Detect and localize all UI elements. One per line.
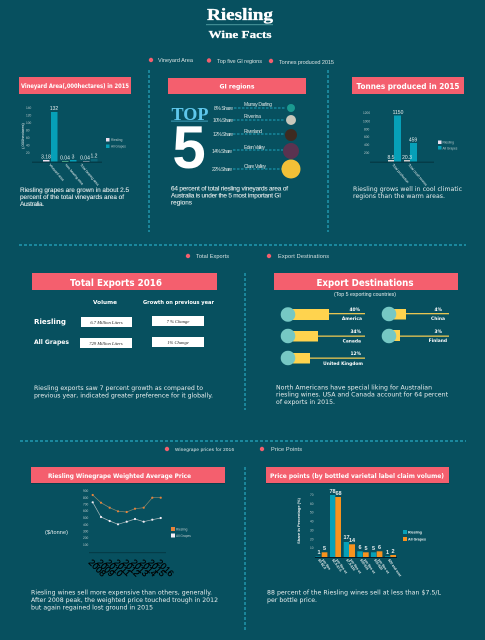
bar chart: vineyard area: 3.18 [41, 154, 51, 160]
bar chart: vineyard area: 140 [26, 106, 32, 110]
chart: destinations: 3% [435, 329, 443, 335]
chart: region shares: Riverina [244, 114, 261, 120]
line chart: prices: 300 [83, 530, 89, 534]
heading: tonnes produced: Tonnes produced in 2015 [356, 82, 460, 91]
table: exports: 1% Change [167, 340, 189, 345]
text: tonnes note: Riesling grows well in cool climatic [353, 186, 463, 193]
bar chart: price points: per litre ex [363, 558, 376, 575]
bar chart: price points: All Grapes [408, 538, 426, 542]
text: vineyard note: percent of the total vineyards area of [20, 194, 124, 201]
chart: destinations [281, 307, 449, 367]
bar chart: vineyard area: All Grapes [111, 144, 126, 148]
table: exports: 7 % Change [167, 319, 189, 324]
chart: region shares: 22% Share [212, 167, 232, 173]
bar chart: price points: 1 [386, 550, 389, 556]
bar chart: price points: 5 [323, 546, 326, 552]
bar chart: tonnes [363, 110, 458, 187]
line chart: prices: 2013 [129, 557, 150, 579]
bar chart: tonnes: All Grapes [442, 146, 458, 150]
bar chart: price points: 2 [391, 549, 395, 555]
bar chart: price points: $2.5-$7.5 [331, 558, 343, 572]
panel: price points [266, 467, 449, 604]
bar chart: tonnes: Total production [391, 163, 410, 184]
heading: price points: Price points (by bottled varietal label claim volume) [270, 472, 444, 480]
line chart: prices: 2009 [95, 557, 116, 579]
line chart: prices [45, 489, 191, 579]
chart: destinations: United Kingdom [323, 361, 363, 367]
bar chart: vineyard area: Non bearing area [64, 163, 84, 186]
panel: total exports [32, 273, 217, 400]
bar chart: price points: per litre ex [335, 558, 348, 575]
bar chart: vineyard area: 132 [50, 106, 58, 112]
line chart: prices: 700 [83, 502, 89, 506]
title: Wine Facts [208, 29, 272, 41]
text: GI note: 64 percent of total riesling vineyards area of [171, 186, 288, 192]
chart: region shares: Riverland [244, 129, 262, 135]
legend: section three: Winegrape prices for 2016 [175, 447, 234, 452]
bar chart: price points: 5 [364, 546, 368, 552]
text: GI note: Australia is under the 5 most important GI [171, 192, 281, 200]
bar chart: vineyard area: 0.04 [80, 156, 90, 162]
bar chart: tonnes: Riesling [442, 140, 454, 144]
table: exports: 6.7 Million Liters [90, 320, 123, 325]
bar chart: tonnes: Total crush tonnes [407, 163, 428, 187]
text: destinations note: riesling wines. USA and Canada account for 64 percent [276, 392, 449, 398]
bar chart: price points: per litre ex [349, 558, 362, 575]
bar chart: vineyard area: Vineyard area [48, 163, 65, 182]
bar chart: tonnes: 8.5 [388, 155, 395, 161]
chart: destinations: 12% [350, 351, 362, 357]
text: price points note: per bottle price. [267, 597, 317, 604]
bar chart: price points: 60 [310, 502, 314, 506]
text: winegrape note: After 2008 peak, the weighted price touched trough in 2012 [31, 597, 218, 604]
chart: destinations: 4% [435, 307, 443, 313]
bar chart: vineyard area: 0.04 [60, 156, 70, 162]
bar chart: tonnes: 800 [364, 128, 370, 132]
text: price points note: 88 percent of the Riesling wines sell at less than $7.5/L [267, 590, 442, 596]
chart: region shares [212, 102, 300, 178]
text: tonnes note: regions than the warm areas. [353, 193, 445, 200]
line chart: prices: 2012 [121, 557, 142, 579]
bar chart: vineyard area: 40 [26, 144, 30, 148]
chart: destinations: America [342, 316, 362, 322]
text: winegrape note: Riesling wines sell more expensive than others, generally. [31, 590, 212, 596]
bar chart: price points: 14 [349, 538, 356, 544]
bar chart: price points: 6 [378, 545, 381, 551]
bar chart: tonnes: 400 [364, 143, 370, 147]
bar chart: price points: 40 [310, 520, 314, 524]
bar chart: tonnes: 1150 [393, 110, 404, 116]
text: GI note: regions [171, 200, 192, 206]
text: vineyard note: Riesling grapes are grown in about 2.5 [20, 187, 129, 194]
line chart: prices: 2014 [138, 557, 159, 579]
title: Riesling [207, 5, 274, 24]
heading: price points [266, 467, 449, 484]
line chart: prices: 2016 [155, 557, 176, 579]
heading: export destinations: Export Destinations [316, 278, 414, 289]
panel: GI regions [168, 78, 306, 206]
bar chart: price points: 10 [310, 546, 314, 550]
line chart: prices: 800 [83, 496, 89, 500]
chart: region shares: Eden Valley [244, 145, 266, 151]
bar chart: price points: 30 [310, 529, 314, 533]
legend: section one: Tonnes produced 2015 [279, 60, 334, 66]
text: exports note: previous year, indicated greater preference for it globally. [34, 392, 213, 400]
heading: winegrape price: Riesling Winegrape Weighted Average Price [48, 472, 192, 480]
chart: destinations: Finland [429, 338, 447, 344]
text: winegrape note: but again regained lost ground in 2015 [31, 604, 153, 612]
chart: destinations: 40% [349, 307, 361, 313]
bar chart: price points: 17 [343, 535, 350, 541]
bar chart: vineyard area: 60 [26, 136, 30, 140]
panel: vineyard area [19, 77, 131, 208]
bar chart: vineyard area: Total bearing area [79, 163, 100, 187]
panel: winegrape price [31, 467, 225, 612]
bar chart: price points: per litre ex [377, 558, 390, 575]
line chart: prices: 600 [83, 509, 89, 513]
legend: section two [186, 254, 329, 260]
bar chart: price points [296, 489, 426, 578]
bar chart: vineyard area: 20 [26, 151, 30, 155]
panel: tonnes produced [352, 77, 464, 200]
legend: section one: Vineyard Area [158, 58, 194, 64]
line chart: prices: 2015 [146, 557, 167, 579]
table: exports: Volume [93, 300, 117, 306]
graphic: top 5: TOP [172, 104, 208, 124]
table: exports: All Grapes [34, 339, 69, 346]
legend: section three: Price Points [271, 447, 302, 453]
table: exports: Riesling [34, 318, 66, 326]
bar chart: price points: 6 [358, 545, 362, 551]
line chart: prices: 900 [83, 489, 89, 493]
bar chart: price points: 70 [310, 493, 314, 497]
bar chart: tonnes: 200 [364, 151, 370, 155]
bar chart: tonnes: 1000 [363, 120, 370, 124]
bar chart: vineyard area: 1.2 [91, 154, 98, 160]
bar chart: tonnes: 600 [364, 135, 370, 139]
bar chart: vineyard area: 100 [26, 121, 32, 125]
graphic: top 5: 5 [172, 114, 206, 181]
text: exports note: Riesling exports saw 7 percent growth as compared to [34, 385, 203, 392]
heading: total exports: Total Exports 2016 [70, 278, 162, 289]
bar chart: price points: $0-$2.5 [317, 558, 327, 570]
heading: export destinations [274, 273, 458, 290]
subtitle: (Top 5 exporting countries) [334, 292, 396, 298]
title [206, 5, 274, 41]
legend: section one [149, 58, 334, 66]
bar chart: tonnes: 20.3 [402, 155, 412, 161]
chart: region shares: 12% Share [213, 132, 233, 138]
chart: region shares: 10% Share [213, 118, 233, 124]
table: exports [34, 300, 214, 348]
bar chart: price points: 1 [317, 550, 321, 556]
bar chart: vineyard area: 80 [26, 128, 30, 132]
chart: destinations: Canada [343, 338, 361, 344]
legend: section two: Total Exports [196, 254, 229, 260]
bar chart: price points: 68 [335, 491, 342, 497]
bar chart: price points: $10-$15 [359, 558, 370, 571]
chart: destinations: China [431, 316, 445, 322]
chart: region shares: Murray Darling [244, 102, 272, 108]
bar chart: price points: $15-$20 [373, 558, 384, 571]
bar chart: price points: 50 [310, 511, 314, 515]
text: destinations note: of exports in 2015. [276, 399, 335, 406]
legend: section two: Export Destinations [278, 254, 329, 260]
text: destinations note: North Americans have special liking for Australian [276, 384, 432, 392]
legend: section one: Top five GI regions [217, 59, 262, 65]
line chart: prices: Riesling [176, 528, 188, 532]
line chart: prices: 2008 [87, 557, 108, 579]
line chart: prices: 2010 [104, 557, 125, 579]
line chart: prices: ($/tonne) [45, 530, 68, 536]
text: vineyard note: Australia. [20, 201, 44, 208]
bar chart: price points: Share in Percentage (%) [296, 497, 301, 544]
bar chart: tonnes: 459 [409, 138, 417, 144]
panel: export destinations [274, 273, 458, 406]
chart: destinations: 34% [350, 329, 362, 335]
bar chart: vineyard area: 3 [72, 154, 75, 160]
line chart: prices: All Grapes [176, 534, 191, 538]
heading: GI regions: GI regions [220, 82, 255, 90]
table: exports: Growth on previous year [143, 300, 214, 306]
line chart: prices: 2011 [112, 557, 133, 578]
bar chart: price points: $20 and over [387, 558, 403, 578]
bar chart: vineyard area: 120 [26, 114, 32, 118]
bar chart: vineyard area [20, 106, 126, 187]
chart: region shares: 14% Share [212, 149, 232, 155]
table: exports: 729 Million Liters [89, 341, 123, 346]
bar chart: price points: 5 [372, 546, 375, 552]
bar chart: price points: per litre [321, 558, 332, 571]
heading: winegrape price [31, 467, 225, 484]
legend: section three [165, 447, 302, 453]
line chart: prices: 100 [83, 543, 89, 547]
line chart: prices: 500 [83, 516, 89, 520]
bar chart: price points: $7.5-$10 [345, 558, 356, 572]
chart: region shares: Clare Valley [244, 164, 266, 170]
chart: region shares: 8% Share [214, 106, 233, 112]
bar chart: price points: Riesling [408, 530, 422, 534]
bar chart: tonnes: 1200 [363, 111, 370, 115]
line chart: prices: 400 [83, 523, 89, 527]
line chart: prices: 200 [83, 536, 89, 540]
bar chart: vineyard area: Riesling [111, 138, 123, 142]
bar chart: price points: 78 [329, 489, 336, 495]
heading: total exports [32, 273, 217, 290]
heading: vineyard area: Vineyard Area(,000hectares) in 2015 [21, 82, 129, 90]
bar chart: price points: 20 [310, 537, 314, 541]
bar chart: vineyard area: (,000hectares) [20, 122, 25, 149]
